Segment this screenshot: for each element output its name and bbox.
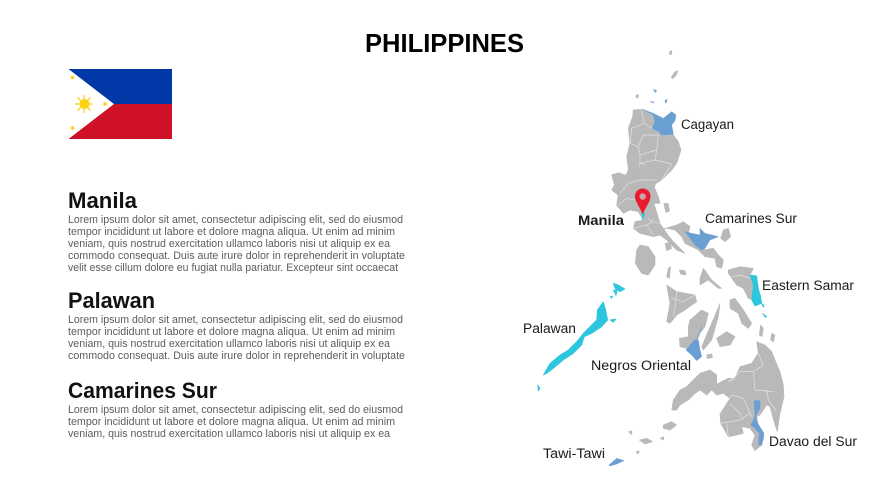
text block: Camarines Sur (68, 378, 403, 440)
map: southern Luzon and Manila (612, 163, 685, 253)
label: Tawi-Tawi: Tawi-Tawi (543, 446, 605, 461)
map: northern Luzon and Cagayan (612, 95, 681, 203)
text block: Manila: Lorem ipsum dolor sit amet, consectetur adipiscing elit, sed do eiusmod (68, 214, 403, 226)
text block: Palawan (68, 288, 405, 362)
label: Cagayan: Cagayan (681, 117, 734, 132)
label: Eastern Samar: Eastern Samar (762, 278, 855, 293)
text block: Manila: tempor incididunt ut labore et dolore magna aliqua. Ut enim ad minim (68, 226, 395, 238)
map: islets north of Luzon (650, 51, 678, 213)
text block: Palawan: commodo consequat. Duis aute irure dolor in reprehenderit in voluptate (68, 350, 405, 362)
map: Visayas, Bicol and Mindoro (635, 203, 775, 350)
text block: Palawan: tempor incididunt ut labore et dolore magna aliqua. Ut enim ad minim (68, 326, 395, 338)
text block: Camarines Sur: Lorem ipsum dolor sit amet, consectetur adipiscing elit, sed do eiusmod (68, 404, 403, 416)
text block: Manila: velit esse cillum dolore eu fugiat nulla pariatur. Excepteur sint occaecat (68, 262, 398, 274)
label: Manila: Manila (578, 213, 625, 228)
text block: Camarines Sur: tempor incididunt ut labore et dolore magna aliqua. Ut enim ad minim (68, 416, 395, 428)
text block: Manila: Manila (68, 188, 138, 213)
title: PHILIPPINES (365, 30, 524, 58)
label: Negros Oriental: Negros Oriental (591, 358, 691, 373)
text block: Palawan: Palawan (68, 288, 155, 313)
icon: flag of the Philippines (68, 69, 172, 139)
text block: Manila: veniam, quis nostrud exercitation ullamco laboris nisi ut aliquip ex ea (68, 238, 390, 250)
text block: Palawan: veniam, quis nostrud exercitation ullamco laboris nisi ut aliquip ex ea (68, 338, 390, 350)
label: Palawan: Palawan (523, 321, 576, 336)
map: Palawan (538, 283, 625, 391)
map: Mindanao (672, 342, 784, 451)
text block: Camarines Sur: veniam, quis nostrud exercitation ullamco laboris nisi ut aliquip ex ea (68, 428, 390, 440)
label: Davao del Sur: Davao del Sur (769, 434, 858, 449)
text block: Manila (68, 188, 405, 274)
icon: Manila location pin (635, 188, 650, 214)
text block: Manila: commodo consequat. Duis aute irure dolor in reprehenderit in voluptate (68, 250, 405, 262)
map: Negros Oriental south and Sulu (609, 340, 713, 466)
text block: Palawan: Lorem ipsum dolor sit amet, consectetur adipiscing elit, sed do eiusmod (68, 314, 403, 326)
label: Camarines Sur: Camarines Sur (705, 211, 798, 226)
map of the Philippines (538, 51, 784, 466)
text block: Camarines Sur: Camarines Sur (68, 378, 217, 403)
